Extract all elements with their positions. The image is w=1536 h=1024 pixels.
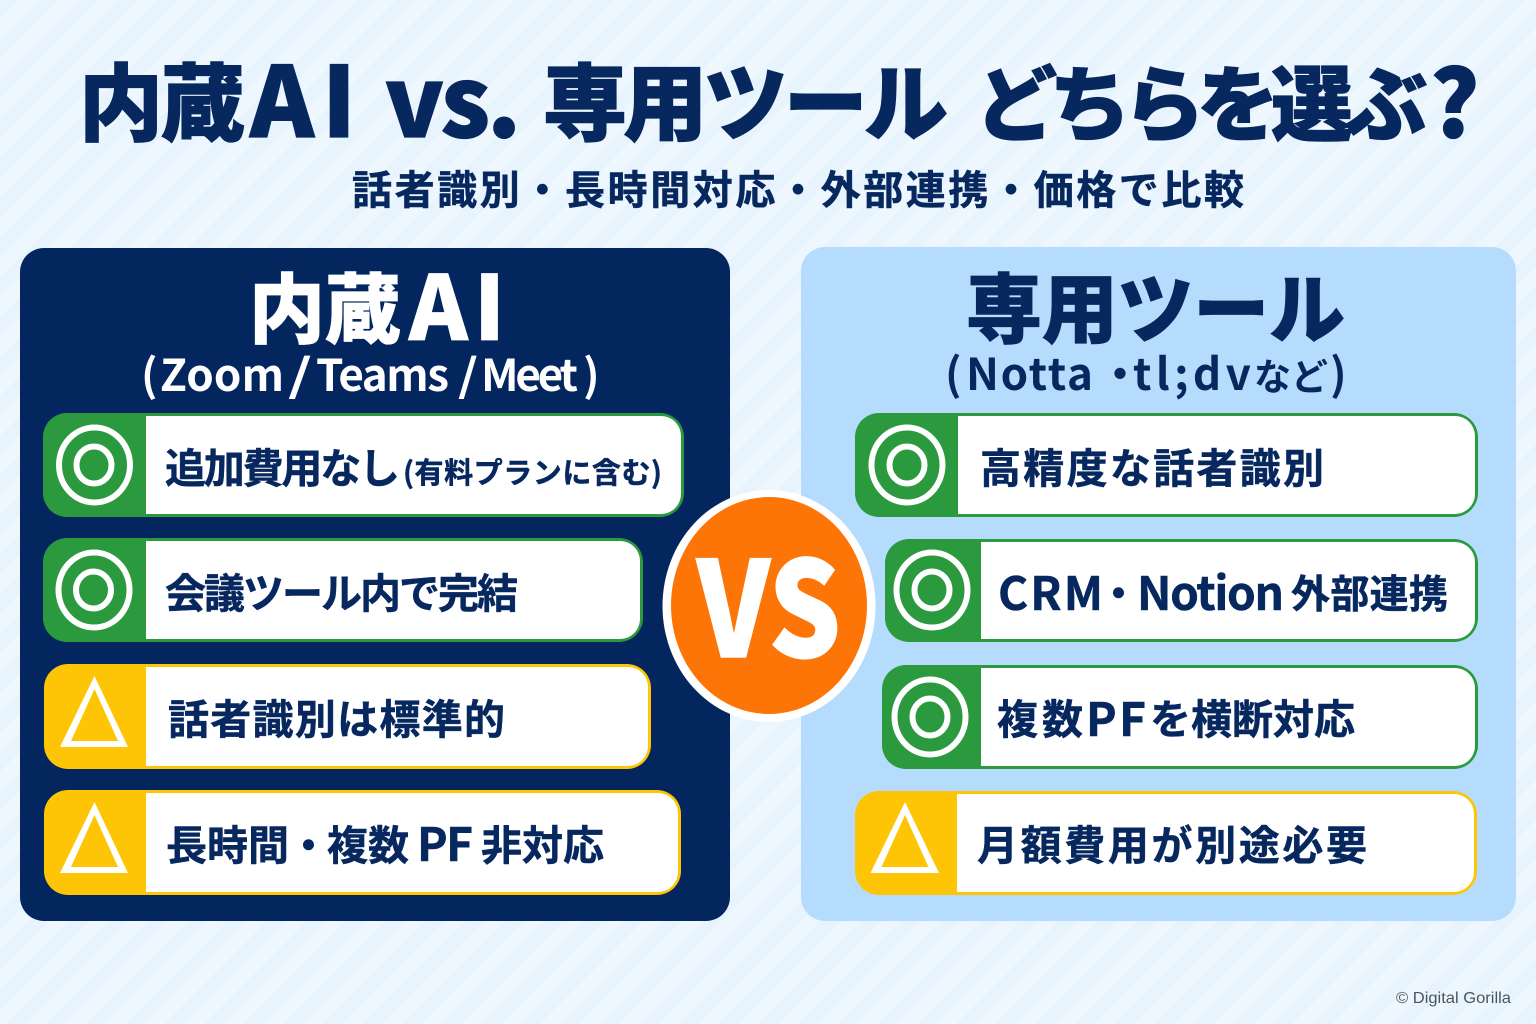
subheading: Notta・tl;dvなど: ): [1330, 339, 1347, 403]
subheading: Zoom/Teams/Meet: Zoom: [160, 340, 284, 404]
row: 長時間・複数PF非対応: [44, 790, 681, 895]
VS badge: VS: [695, 505, 841, 696]
subheading: Notta・tl;dvなど: tl;dv: [1133, 339, 1251, 403]
row: 会議ツール内で完結: [43, 538, 643, 642]
title: AI: [249, 24, 356, 165]
subtitle: 話者識別・長時間対応・外部連携・価格で比較: [352, 158, 1244, 216]
subheading: Zoom/Teams/Meet: [141, 340, 600, 404]
subheading: Zoom/Teams/Meet: /: [458, 340, 478, 404]
row: 複数PFを横断対応: を横断対応: [1150, 686, 1355, 746]
heading: 内蔵AI: [249, 237, 505, 366]
row: CRM・Notion外部連携: ・: [1098, 560, 1139, 620]
subheading: Zoom/Teams/Meet: Teams: [316, 340, 449, 404]
title: どちらを選ぶ: [975, 39, 1427, 158]
heading: 内蔵AI: 内蔵: [249, 249, 401, 359]
row: 話者識別は標準的: [44, 664, 651, 769]
row: CRM・Notion外部連携: 外部連携: [1291, 564, 1448, 620]
subheading: Zoom/Teams/Meet: (: [141, 340, 158, 404]
row: 長時間・複数PF非対応: 長時間: [166, 812, 289, 872]
title: ?: [1430, 31, 1479, 164]
row: CRM・Notion外部連携: Notion: [1137, 558, 1284, 624]
row: 複数PFを横断対応: PF: [1086, 684, 1146, 750]
row: 高精度な話者識別: [855, 413, 1478, 517]
row: 月額費用が別途必要: [855, 791, 1477, 895]
row: 追加費用なし: 追加費用なし: [165, 435, 400, 495]
heading: 専用ツール: 専用ツール: [966, 249, 1345, 359]
title: 内蔵: [79, 38, 245, 159]
subheading: Zoom/Teams/Meet: Meet: [481, 340, 578, 404]
title: 専用ツール: [543, 38, 948, 159]
title: vs.: [385, 24, 521, 165]
row: 長時間・複数PF非対応: ・: [288, 812, 329, 872]
row: 月額費用が別途必要: 月額費用が別途必要: [977, 812, 1367, 872]
row: 複数PFを横断対応: [882, 665, 1478, 769]
subheading: Zoom/Teams/Meet: ): [583, 340, 600, 404]
subheading: Notta・tl;dvなど: ・: [1098, 339, 1142, 403]
subheading: Notta・tl;dvなど: [945, 339, 1347, 403]
row: 話者識別は標準的: 話者識別は標準的: [168, 686, 505, 746]
row: 追加費用なし: [43, 413, 684, 517]
subheading: Notta・tl;dvなど: など: [1254, 347, 1328, 401]
row: 会議ツール内で完結: 会議ツール内で完結: [165, 560, 518, 620]
row: 高精度な話者識別: 高精度な話者識別: [980, 435, 1324, 495]
subheading: Zoom/Teams/Meet: /: [288, 340, 312, 404]
heading: 内蔵AI: AI: [408, 237, 505, 366]
VS badge: [662, 490, 876, 722]
panel: 専用ツール: [801, 247, 1516, 921]
row: CRM・Notion外部連携: [885, 539, 1478, 642]
title: [79, 24, 1479, 165]
row: 長時間・複数PF非対応: 非対応: [481, 812, 604, 872]
panel: 内蔵AI: [20, 237, 730, 921]
row: CRM・Notion外部連携: CRM: [998, 558, 1103, 624]
row: 追加費用なし: (有料プランに含む): [403, 450, 662, 492]
subheading: Notta・tl;dvなど: (: [945, 339, 962, 403]
subheading: Notta・tl;dvなど: Notta: [966, 339, 1093, 403]
row: 複数PFを横断対応: 複数: [997, 686, 1083, 746]
row: 長時間・複数PF非対応: PF: [417, 809, 473, 875]
copyright: © Digital Gorilla: [1396, 990, 1511, 1007]
row: 長時間・複数PF非対応: 複数: [327, 812, 409, 872]
